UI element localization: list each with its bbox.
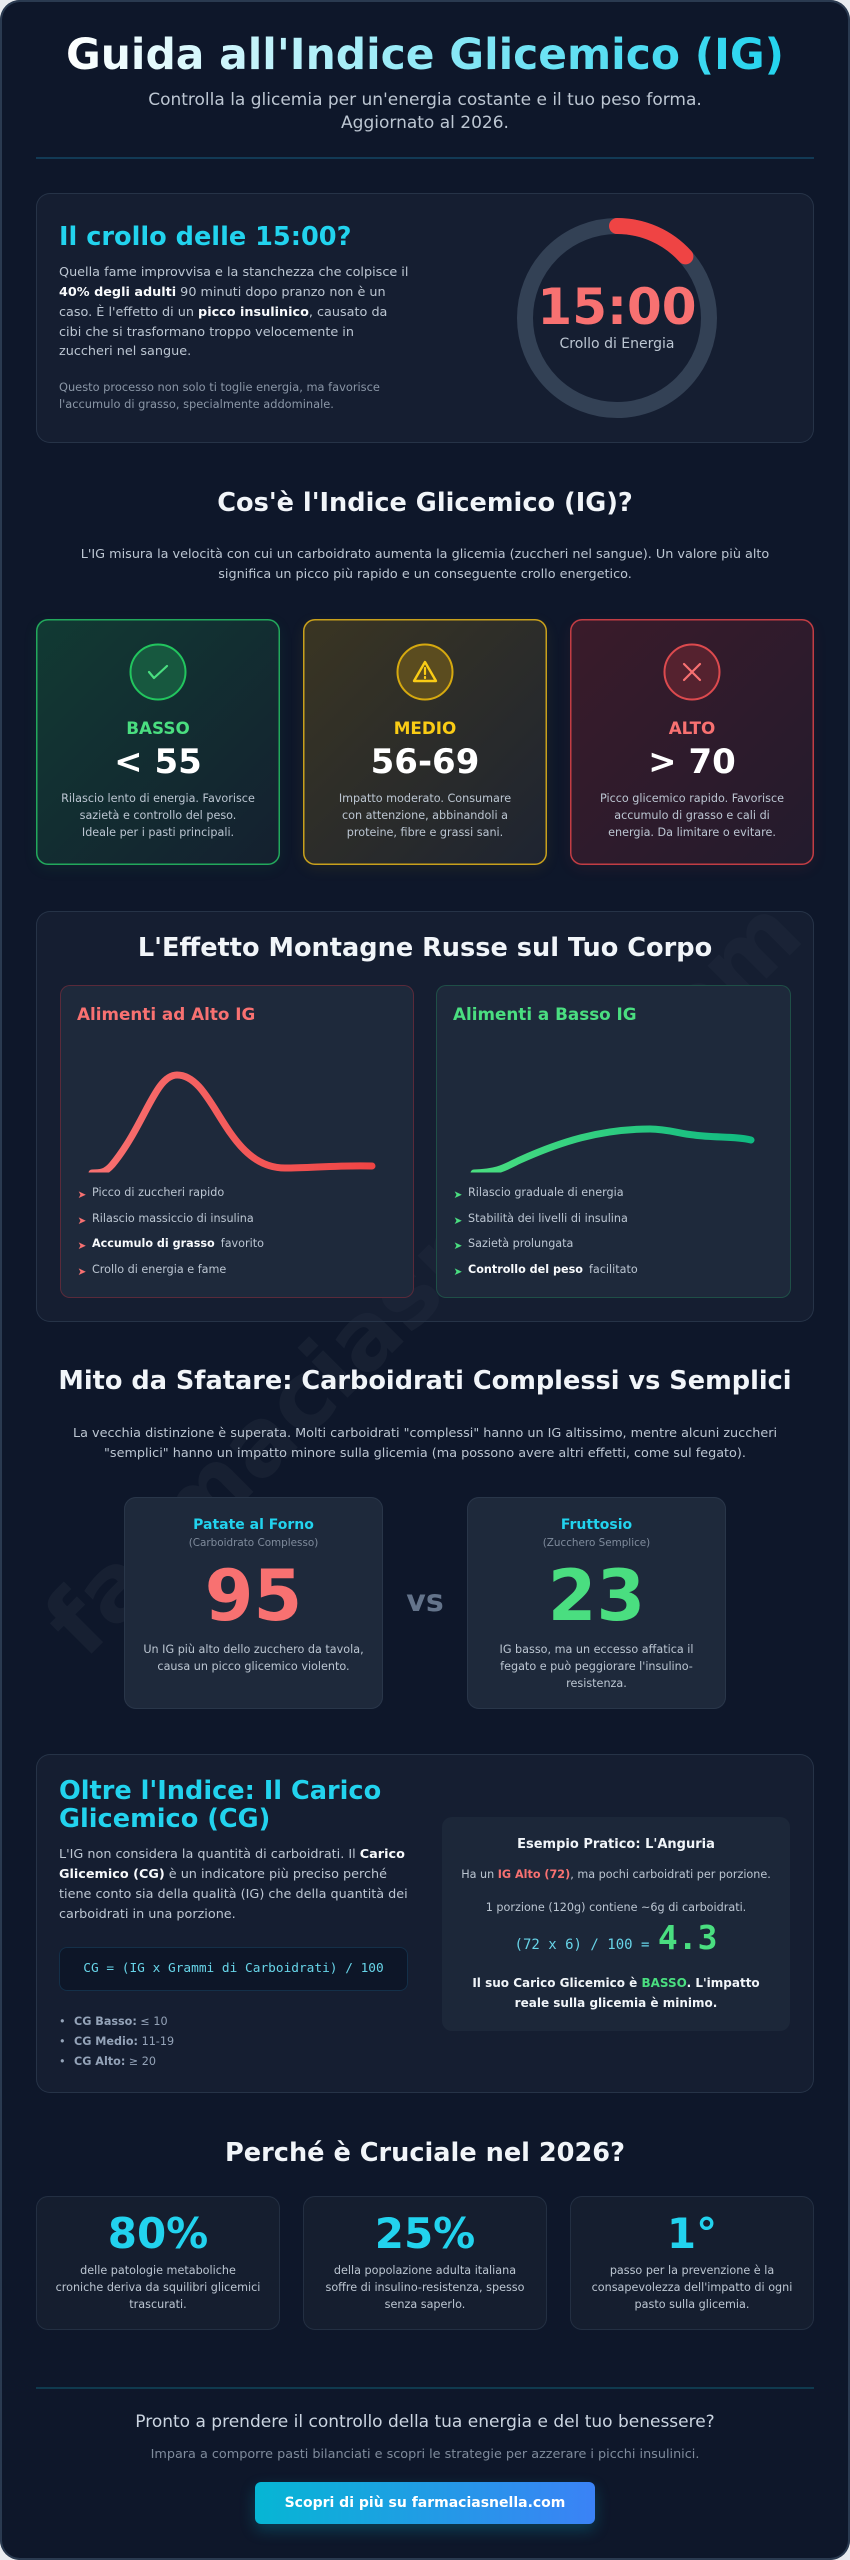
text: fruttosio: fegato e può peggiorare l'insulino- [500, 1660, 693, 1672]
value: 23: 23 [548, 1555, 645, 1637]
text: esempio riga 2: 1 porzione (120g) contiene ~6g di carboidrati. [486, 1901, 746, 1914]
list: basso IG: Controllo del peso facilitato [468, 1262, 638, 1276]
list: alto IG: Accumulo di grasso favorito [92, 1237, 264, 1250]
button: farmaciasnella: Scopri di più su farmaciasnella.com [285, 2495, 565, 2511]
heading: basso IG: Alimenti a Basso IG [453, 1004, 637, 1024]
stat value: 1° [667, 2209, 717, 2258]
card: IG alto [570, 619, 814, 865]
stat value: 80% [108, 2209, 208, 2258]
formula box: CG = (IG x Grammi di Carboidrati) / 100 [83, 1961, 384, 1976]
card subtitle: patate: (Carboidrato Complesso) [189, 1537, 318, 1549]
list: soglie CG: CG Medio: 11-19 [74, 2035, 174, 2048]
watermark: farmaciasnella.com [24, 878, 822, 1676]
panel: alto IG [60, 985, 414, 1298]
stat text: senza saperlo. [385, 2298, 465, 2310]
title: Guida all'Indice Glicemico (IG) [66, 30, 784, 79]
list: basso IG: Rilascio graduale di energia [468, 1186, 624, 1199]
text: definizione IG: significa un picco più rapido e un conseguente crollo energetico. [218, 567, 632, 582]
text: mito description [73, 1426, 777, 1461]
text: crollo description: cibi che si trasformano troppo velocemente in [59, 325, 354, 340]
card: patate al forno [124, 1497, 383, 1709]
text: fruttosio: resistenza. [566, 1676, 627, 1690]
stat text: croniche deriva da squilibri glicemici [56, 2280, 260, 2294]
panel: effetto montagne russe [36, 911, 814, 1322]
text: carico description: L'IG non considera la quantità di carboidrati. Il Carico [59, 1847, 405, 1862]
card title: fruttosio: Fruttosio [561, 1517, 632, 1533]
heading: montagne russe: L'Effetto Montagne Russe sul Tuo Corpo [138, 933, 712, 963]
text: carico description [59, 1847, 408, 1922]
label: alto: ALTO [669, 718, 715, 738]
text: definizione IG: L'IG misura la velocità con cui un carboidrato aumenta la glicemia (zuccheri nel sangue). Un valore più alto [81, 547, 769, 562]
card: IG basso [36, 619, 280, 865]
icon: warning [396, 644, 454, 700]
stat text [326, 2264, 524, 2310]
stat value: 25% [375, 2209, 475, 2258]
text: patate: Un IG più alto dello zucchero da tavola, [143, 1642, 364, 1656]
list: soglie CG: • [59, 2035, 66, 2048]
text: crollo note: Questo processo non solo ti toglie energia, ma favorisce [59, 380, 380, 394]
text: crollo description: caso. È l'effetto di un picco insulinico, causato da [59, 305, 387, 320]
text: alto: energia. Da limitare o evitare. [608, 826, 776, 839]
text: conclusione: Il suo Carico Glicemico è BASSO. L'impatto [472, 1976, 760, 1990]
list: alto IG: Crollo di energia e fame [92, 1262, 226, 1276]
card: IG medio [303, 619, 547, 865]
formula: esempio: (72 x 6) / 100 = 4.3 [515, 1918, 717, 1957]
panel: esempio anguria [442, 1817, 790, 2031]
card subtitle: fruttosio: (Zucchero Semplice) [543, 1537, 650, 1549]
card: fruttosio [467, 1497, 726, 1709]
text: carico description: Glicemico (CG) è un indicatore più preciso perché [59, 1867, 387, 1882]
ring time: 15:00 [537, 278, 697, 336]
list: basso IG [454, 1186, 638, 1278]
subtitle: Controlla la glicemia per un'energia costante e il tuo peso forma. [148, 90, 702, 110]
stat text: trascurati. [129, 2298, 187, 2310]
value: basso: < 55 [114, 742, 202, 782]
text: call to action sub: Impara a comporre pasti bilanciati e scopri le strategie per azzerare i picchi insulinici. [151, 2447, 699, 2462]
text: fruttosio [500, 1642, 693, 1690]
subtitle [148, 90, 702, 133]
subtitle: Aggiornato al 2026. [341, 113, 509, 133]
text: conclusione: reale sulla glicemia è minimo. [515, 1996, 717, 2010]
text: medio: con attenzione, abbinandoli a [342, 809, 508, 822]
panel: carico glicemico [36, 1754, 814, 2093]
text: basso: Rilascio lento di energia. Favorisce [61, 792, 255, 805]
stat: 80% [36, 2196, 280, 2330]
stat text: soffre di insulino-resistenza, spesso [326, 2280, 524, 2294]
text: alto [600, 792, 784, 839]
list: alto IG: ➤ [78, 1189, 86, 1201]
button: farmaciasnella [255, 2482, 595, 2524]
stat text: pasto sulla glicemia. [635, 2298, 749, 2310]
list: basso IG: ➤ [454, 1214, 462, 1226]
stat: 1° [570, 2196, 814, 2330]
heading: mito da sfatare: Mito da Sfatare: Carboidrati Complessi vs Semplici [58, 1366, 792, 1396]
heading: alto IG: Alimenti ad Alto IG [77, 1004, 255, 1024]
stat: 25% [303, 2196, 547, 2330]
stat text: della popolazione adulta italiana [334, 2264, 516, 2276]
card title: patate: Patate al Forno [193, 1517, 314, 1533]
list: soglie CG: • [59, 2055, 66, 2068]
panel: il crollo delle 15:00 [36, 193, 814, 443]
formula box [59, 1947, 408, 1991]
stat text [56, 2264, 260, 2310]
text: conclusione [472, 1976, 760, 2010]
heading: carico glicemico [59, 1776, 381, 1834]
stat text: passo per la prevenzione è la [610, 2264, 774, 2276]
list: alto IG: ➤ [78, 1266, 86, 1278]
text: esempio riga 1: Ha un IG Alto (72), ma pochi carboidrati per porzione. [461, 1868, 771, 1880]
list: soglie CG: CG Alto: ≥ 20 [74, 2055, 156, 2068]
text: crollo note [59, 380, 380, 410]
label: medio: MEDIO [394, 718, 456, 738]
heading: perché è cruciale: Perché è Cruciale nel 2026? [225, 2138, 625, 2168]
text: crollo description: zuccheri nel sangue. [59, 344, 191, 359]
list: soglie CG: CG Basso: ≤ 10 [74, 2015, 168, 2028]
list: soglie CG: • [59, 2015, 66, 2028]
list: alto IG: Rilascio massiccio di insulina [92, 1212, 254, 1224]
chart: curva alto IG [88, 1072, 376, 1172]
text: medio: proteine, fibre e grassi sani. [347, 826, 503, 839]
text: basso [61, 792, 255, 839]
stat text: delle patologie metaboliche [80, 2264, 236, 2276]
label: basso: BASSO [126, 718, 190, 738]
text: carico description: tiene conto sia della qualità (IG) che della quantità dei [59, 1887, 408, 1902]
text: crollo description: 40% degli adulti 90 minuti dopo pranzo non è un [59, 285, 386, 300]
stat text [592, 2264, 792, 2310]
text: definizione IG [81, 547, 769, 582]
chart: energy ring [517, 218, 717, 418]
heading: carico glicemico: Oltre l'Indice: Il Carico [59, 1776, 381, 1806]
list: basso IG: ➤ [454, 1266, 462, 1278]
icon: cross [664, 644, 720, 700]
stat text: consapevolezza dell'impatto di ogni [592, 2280, 792, 2294]
text: medio [339, 792, 511, 839]
value: medio: 56-69 [371, 742, 479, 782]
heading: carico glicemico: Glicemico (CG) [59, 1804, 270, 1834]
text: crollo description: Quella fame improvvisa e la stanchezza che colpisce il [59, 265, 408, 280]
text: crollo description [59, 265, 408, 359]
icon: check [130, 644, 186, 700]
list: basso IG: ➤ [454, 1240, 462, 1252]
text: mito description: "semplici" hanno un impatto minore sulla glicemia (ma possono avere altri effetti, come sul fegato). [104, 1446, 746, 1461]
value: 95: 95 [205, 1555, 302, 1637]
list: basso IG: Stabilità dei livelli di insulina [468, 1212, 628, 1224]
value: alto: > 70 [648, 742, 736, 782]
list: basso IG: ➤ [454, 1189, 462, 1201]
text: carico description: carboidrati in una porzione. [59, 1907, 236, 1922]
list: basso IG: Sazietà prolungata [468, 1237, 573, 1250]
list: alto IG: Picco di zuccheri rapido [92, 1186, 224, 1199]
heading: cos'è l'indice glicemico: Cos'è l'Indice Glicemico (IG)? [217, 488, 633, 518]
list: alto IG: ➤ [78, 1214, 86, 1226]
text: basso: sazietà e controllo del peso. [80, 809, 236, 822]
text: crollo note: l'accumulo di grasso, specialmente addominale. [59, 396, 334, 410]
text: medio: Impatto moderato. Consumare [339, 792, 511, 805]
text: patate [143, 1642, 364, 1672]
panel: basso IG [436, 985, 791, 1298]
heading: esempio: Esempio Pratico: L'Anguria [517, 1837, 715, 1852]
list: alto IG [78, 1186, 264, 1278]
text: alto: accumulo di grasso e cali di [614, 809, 770, 822]
list: soglie CG [59, 2015, 174, 2068]
text: call to action: Pronto a prendere il controllo della tua energia e del tuo benessere? [135, 2412, 715, 2432]
ring label: Crollo di Energia [559, 336, 674, 352]
text: basso: Ideale per i pasti principali. [82, 826, 234, 839]
chart: curva basso IG [470, 1126, 754, 1172]
text: alto: Picco glicemico rapido. Favorisce [600, 792, 784, 805]
heading: crollo: Il crollo delle 15:00? [59, 222, 351, 252]
list: alto IG: ➤ [78, 1240, 86, 1252]
label: vs: vs [406, 1584, 444, 1619]
text: patate: causa un picco glicemico violento. [157, 1660, 350, 1672]
text: mito description: La vecchia distinzione è superata. Molti carboidrati "complessi" hanno un IG altissimo, mentre alcuni zuccheri [73, 1426, 777, 1441]
text: fruttosio: IG basso, ma un eccesso affatica il [500, 1642, 693, 1656]
